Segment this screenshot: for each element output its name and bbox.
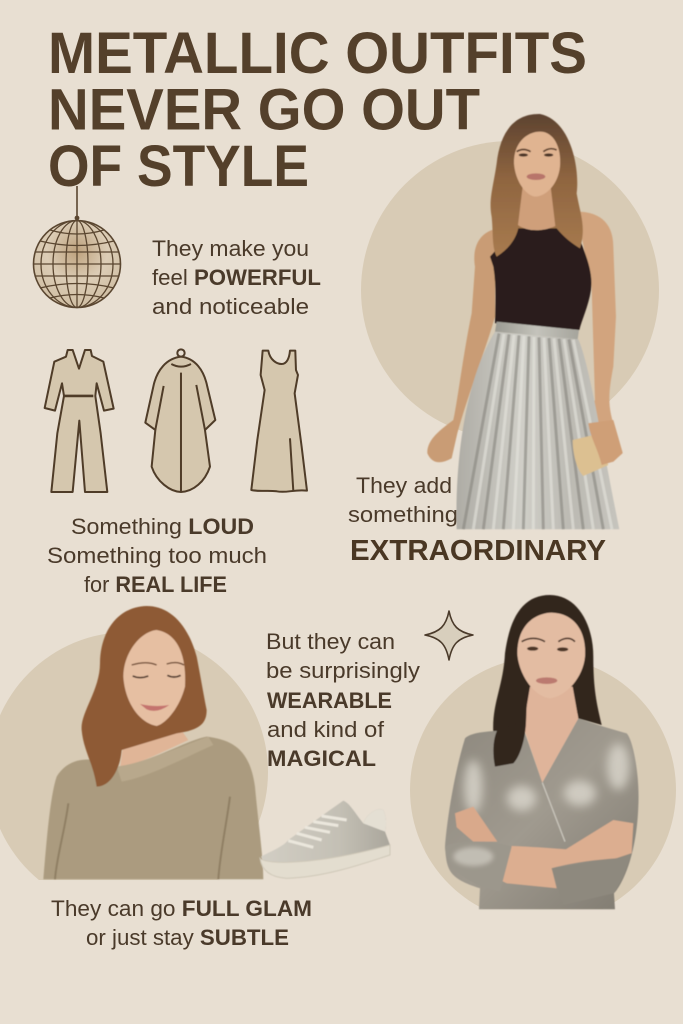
text: they add something: something bbox=[348, 502, 458, 527]
text: but they can be wearable and magical: and kind of bbox=[267, 717, 385, 742]
text: they add something: They add bbox=[356, 473, 452, 498]
text: but they can be wearable and magical bbox=[266, 629, 420, 771]
photo: woman in metallic wrap top bbox=[445, 595, 639, 909]
text: full glam or subtle bbox=[51, 896, 312, 950]
panel: circle behind woman in sweater bbox=[0, 634, 268, 880]
title: NEVER GO OUT bbox=[48, 78, 480, 142]
title: METALLIC OUTFITS bbox=[48, 21, 587, 86]
icons: outfits bbox=[45, 349, 307, 492]
icon: dress bbox=[251, 351, 307, 492]
text: they make you feel powerful: They make you bbox=[152, 236, 309, 261]
text: something loud: Something LOUD bbox=[71, 514, 254, 539]
icon: long coat bbox=[145, 349, 215, 492]
hair: head and waves bbox=[491, 114, 583, 257]
photo: woman in pleated metallic skirt bbox=[427, 114, 623, 529]
text: full glam or subtle: They can go FULL GLAM bbox=[51, 896, 312, 921]
title: OF STYLE bbox=[48, 134, 309, 199]
text: extraordinary: EXTRAORDINARY bbox=[350, 535, 606, 567]
text: something loud bbox=[47, 514, 267, 597]
icon: jumpsuit bbox=[45, 350, 114, 492]
panel: circle behind woman in metallic wrap top bbox=[410, 657, 676, 923]
icon: sparkle star bbox=[425, 611, 473, 660]
photo: silver sneaker bbox=[260, 801, 390, 878]
text: but they can be wearable and magical: WEARABLE bbox=[267, 688, 392, 713]
icon: disco ball bbox=[34, 186, 120, 308]
text: they make you feel powerful: and noticeable bbox=[152, 294, 309, 319]
text: something loud: Something too much bbox=[47, 543, 267, 568]
text: they make you feel powerful bbox=[152, 236, 321, 319]
text: they make you feel powerful: feel POWERFUL bbox=[152, 265, 321, 290]
text: but they can be wearable and magical: But they can bbox=[266, 629, 395, 654]
title bbox=[48, 21, 587, 199]
text: full glam or subtle: or just stay SUBTLE bbox=[86, 925, 289, 950]
text: but they can be wearable and magical: be surprisingly bbox=[266, 658, 420, 683]
text: something loud: for REAL LIFE bbox=[84, 572, 227, 597]
panel: circle behind woman in skirt bbox=[361, 141, 659, 439]
text: but they can be wearable and magical: MAGICAL bbox=[267, 746, 376, 771]
photo: woman in knit sweater bbox=[43, 606, 263, 879]
text: they add something bbox=[348, 473, 458, 527]
